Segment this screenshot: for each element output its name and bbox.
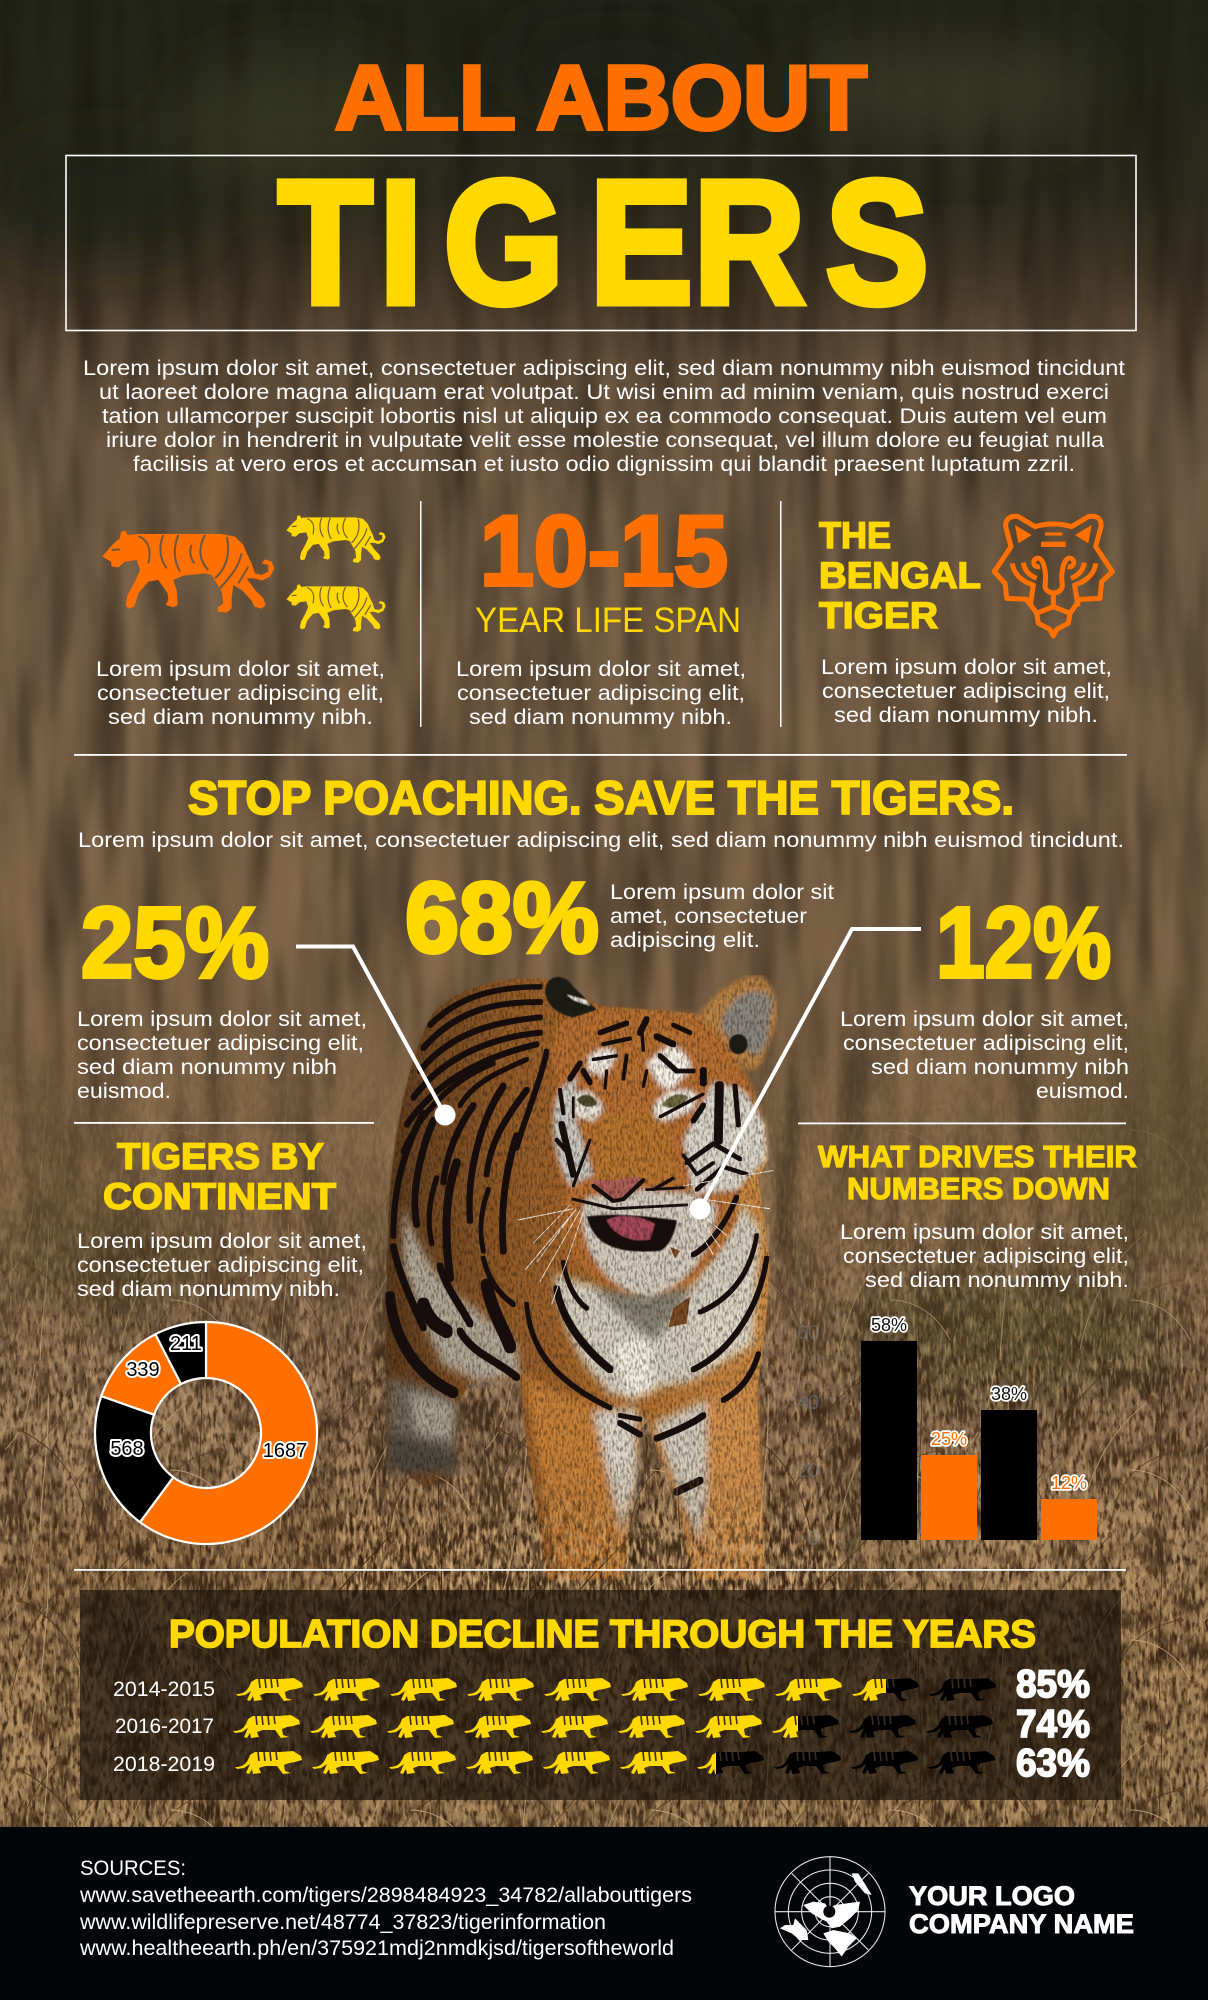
text: 25 percent caption: consectetuer adipiscing elit,: [77, 1032, 364, 1055]
year labels: 2014-2015: [113, 1678, 215, 1701]
heading: stop poaching: STOP POACHING. SAVE THE TIGERS.: [188, 771, 1014, 824]
icon: large orange tiger: [102, 531, 274, 613]
logo text: YOUR LOGO: [909, 1881, 1075, 1911]
text: drivers caption: [840, 1221, 1129, 1292]
text: 12 percent caption: consectetuer adipiscing elit,: [843, 1032, 1129, 1055]
text: life span caption: consectetuer adipiscing elit,: [457, 682, 745, 705]
pictogram row 2016-2017: [233, 1715, 993, 1738]
sources: www.savetheearth.com/tigers/2898484923_34782/allabouttigers: [79, 1884, 692, 1907]
head details: [545, 977, 748, 1252]
panel: what drives their numbers down: [797, 1139, 1137, 1550]
text: 68 percent caption: adipiscing elit.: [610, 929, 760, 952]
callout: left connector: [296, 946, 456, 1126]
pictogram row 2014-2015: [236, 1678, 996, 1701]
icon: small yellow tiger top: [286, 515, 386, 563]
text: 25 percent caption: [77, 1008, 367, 1103]
bar chart labels: 25%: [931, 1429, 967, 1449]
bar chart axis: 60: [797, 1322, 819, 1344]
tiger photo: [386, 975, 777, 1580]
text: 12 percent caption: sed diam nonummy nibh: [871, 1056, 1129, 1079]
percentages: 63%: [1016, 1742, 1090, 1785]
callout: right connector: [690, 929, 921, 1220]
divider left: [420, 501, 422, 727]
stat: 68 percent: [405, 862, 834, 974]
heading: population decline: POPULATION DECLINE THROUGH THE YEARS: [169, 1613, 1036, 1656]
panel: bengal tiger: [819, 515, 1112, 727]
text: 12 percent caption: [840, 1008, 1129, 1103]
text: tiger icons caption: [96, 658, 385, 729]
sources: [79, 1857, 692, 1960]
text: drivers caption: Lorem ipsum dolor sit amet,: [840, 1221, 1129, 1244]
logo text: [909, 1881, 1134, 1939]
text: 25 percent caption: euismod.: [77, 1080, 171, 1103]
sources: www.healtheearth.ph/en/375921mdj2nmdkjsd/tigersoftheworld: [79, 1937, 674, 1960]
divider under left stat: [74, 1122, 374, 1124]
percentages: 85%: [1016, 1663, 1090, 1706]
intro paragraph: facilisis at vero eros et accumsan et iusto odio dignissim qui blandit praesent luptatum zzril.: [133, 453, 1075, 476]
text: drivers caption: sed diam nonummy nibh.: [865, 1269, 1129, 1292]
text: tiger icons caption: sed diam nonummy nibh.: [108, 706, 373, 729]
text: tiger icons caption: Lorem ipsum dolor sit amet,: [96, 658, 385, 681]
panel: population decline backdrop: [80, 1590, 1121, 1800]
bar chart axis: [797, 1322, 819, 1550]
life span figure: 10-15: [480, 495, 728, 606]
doughnut labels: 1687: [263, 1440, 307, 1462]
percentages: [1016, 1663, 1090, 1785]
bar chart labels: [871, 1315, 1087, 1493]
divider under right stat: [798, 1122, 1126, 1124]
text: 68 percent caption: Lorem ipsum dolor sit: [610, 881, 834, 904]
text: tiger icons caption: consectetuer adipiscing elit,: [97, 682, 384, 705]
pictogram row 2018-2019: [235, 1751, 995, 1774]
text: life span caption: [456, 658, 746, 729]
intro paragraph: [83, 357, 1125, 476]
intro paragraph: Lorem ipsum dolor sit amet, consectetuer adipiscing elit, sed diam nonummy nibh euismod tincidunt: [83, 357, 1125, 380]
stat: 25 percent: 25%: [81, 887, 269, 999]
year labels: [113, 1678, 215, 1776]
text: life span caption: Lorem ipsum dolor sit amet,: [456, 658, 746, 681]
sources: www.wildlifepreserve.net/48774_37823/tigerinformation: [79, 1911, 606, 1934]
heading: what drives their numbers down: WHAT DRIVES THEIR: [818, 1139, 1137, 1174]
divider under stats row: [74, 754, 1127, 756]
bar chart labels: 12%: [1051, 1473, 1087, 1493]
text: 12 percent caption: euismod.: [1036, 1080, 1129, 1103]
text: 12 percent caption: Lorem ipsum dolor sit amet,: [840, 1008, 1129, 1031]
bar chart axis: 40: [797, 1392, 819, 1414]
title frame: [66, 156, 1136, 330]
divider right: [780, 501, 782, 727]
icon: tiger head: [994, 516, 1112, 636]
body stripes: [390, 987, 767, 1492]
bar chart labels: 38%: [991, 1384, 1027, 1404]
stat: 12 percent: [840, 887, 1129, 1103]
divider above population panel: [74, 1569, 1126, 1571]
text: 68 percent caption: [610, 881, 834, 952]
logo text: COMPANY NAME: [909, 1909, 1134, 1939]
stat: 68 percent: 68%: [405, 862, 599, 974]
intro paragraph: tation ullamcorper suscipit lobortis nisl ut aliquip ex ea commodo consequat. Duis autem vel eum: [102, 405, 1107, 428]
text: continent caption: Lorem ipsum dolor sit amet,: [77, 1230, 367, 1253]
percentages: 74%: [1016, 1703, 1090, 1746]
heading: tigers by continent: CONTINENT: [103, 1176, 336, 1217]
panel: life span: [456, 495, 746, 729]
sources: SOURCES:: [80, 1857, 186, 1880]
intro paragraph: iriure dolor in hendrerit in vulputate velit esse molestie consequat, vel illum dolore eu feugiat nulla: [106, 429, 1104, 452]
heading: tigers by continent: [103, 1136, 336, 1217]
text: 25 percent caption: Lorem ipsum dolor sit amet,: [77, 1008, 367, 1031]
footer band: [0, 1827, 1208, 2000]
bar chart axis: 20: [797, 1460, 819, 1482]
heading: what drives their numbers down: NUMBERS DOWN: [847, 1171, 1110, 1206]
text: bengal tiger caption: sed diam nonummy nibh.: [834, 704, 1098, 727]
text: bengal tiger caption: Lorem ipsum dolor sit amet,: [821, 656, 1112, 679]
foreground grass over tiger legs: [340, 1460, 840, 1600]
logo: globe: [775, 1857, 885, 1967]
text: continent caption: sed diam nonummy nibh.: [77, 1278, 340, 1301]
text: continent caption: [77, 1230, 367, 1301]
text: bengal tiger caption: [821, 656, 1112, 727]
text: continent caption: consectetuer adipiscing elit,: [77, 1254, 364, 1277]
doughnut labels: 211: [170, 1333, 202, 1355]
stat: 25 percent: [77, 887, 367, 1103]
text: drivers caption: consectetuer adipiscing elit,: [843, 1245, 1129, 1268]
title: tigers: TIGERS: [278, 145, 929, 341]
text: bengal tiger caption: consectetuer adipiscing elit,: [822, 680, 1110, 703]
intro paragraph: ut laoreet dolore magna aliquam erat volutpat. Ut wisi enim ad minim veniam, quis nostrud exerci: [99, 381, 1109, 404]
panel: tiger icons: [96, 515, 386, 729]
heading: the bengal tiger: BENGAL: [819, 555, 981, 596]
text: life span caption: sed diam nonummy nibh.: [469, 706, 732, 729]
head shapes: [552, 975, 777, 1297]
text: 25 percent caption: sed diam nonummy nibh: [77, 1056, 337, 1079]
title: all about: ALL ABOUT: [335, 48, 867, 149]
panel: tigers by continent: [77, 1136, 367, 1544]
stat: 12 percent: 12%: [936, 887, 1111, 999]
doughnut labels: [110, 1333, 307, 1462]
bar chart axis: 0: [808, 1528, 819, 1550]
heading: the bengal tiger: [819, 515, 981, 636]
subheading text: Lorem ipsum dolor sit amet, consectetuer adipiscing elit, sed diam nonummy nibh euismod tincidunt.: [78, 829, 1124, 852]
heading: what drives their numbers down: [818, 1139, 1137, 1206]
icon: small yellow tiger bottom: [286, 584, 386, 632]
heading: tigers by continent: TIGERS BY: [117, 1136, 324, 1177]
text: 68 percent caption: amet, consectetuer: [610, 905, 807, 928]
heading: the bengal tiger: TIGER: [819, 595, 938, 636]
doughnut labels: 339: [126, 1359, 160, 1381]
heading: the bengal tiger: THE: [819, 515, 891, 556]
bar chart labels: 58%: [871, 1315, 907, 1335]
year labels: 2016-2017: [115, 1715, 214, 1738]
year labels: 2018-2019: [113, 1753, 215, 1776]
life span label: YEAR LIFE SPAN: [475, 601, 741, 640]
doughnut chart: [95, 1322, 317, 1544]
doughnut labels: 568: [110, 1438, 144, 1460]
bar chart: [861, 1341, 1097, 1540]
